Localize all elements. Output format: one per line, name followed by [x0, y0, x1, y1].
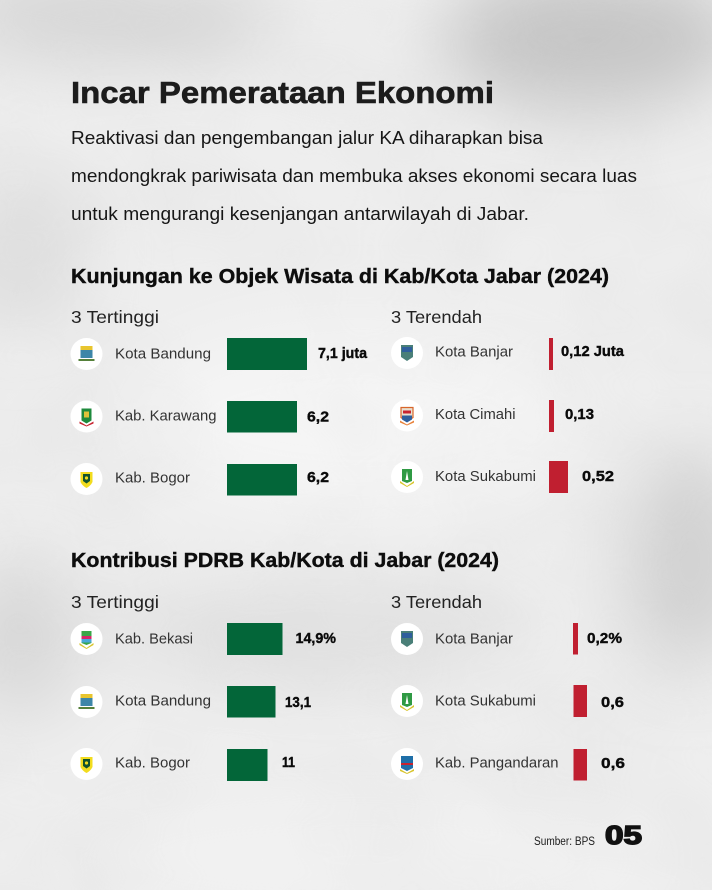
row: Kab. Bekasi PDRB: Kab. Bekasi — [115, 630, 193, 648]
row: Kab. Karawang wisata: Kab. Karawang — [115, 408, 216, 424]
icon: lambang Kab. Bogor — [70, 748, 102, 780]
subheading: 3 tertinggi PDRB: 3 Tertinggi — [71, 592, 159, 612]
icon: lambang Kota Banjar — [391, 623, 423, 655]
intro paragraph — [71, 127, 637, 224]
row: Kota Banjar wisata: Kota Banjar — [435, 344, 513, 360]
bar: 7,1 juta — [227, 338, 307, 370]
row: Kota Bandung wisata: 7,1 juta — [318, 345, 368, 362]
row: Kab. Pangandaran PDRB: Kab. Pangandaran — [435, 754, 558, 772]
row: Kab. Karawang wisata: 6,2 — [307, 408, 329, 426]
row: Kota Banjar PDRB: 0,2% — [587, 630, 622, 647]
row: Kota Cimahi wisata — [391, 400, 594, 432]
bar: 13,1 — [227, 686, 276, 718]
bar: 11 — [227, 749, 268, 781]
bar: 0,2% — [573, 623, 578, 654]
intro paragraph: untuk mengurangi kesenjangan antarwilayah di Jabar. — [71, 203, 529, 224]
icon: lambang Kab. Bogor — [70, 463, 102, 495]
bar: 0,52 — [549, 461, 568, 493]
row: Kota Sukabumi wisata — [391, 461, 614, 493]
row: Kab. Bogor PDRB: 11 — [282, 754, 295, 771]
bar: 0,6 — [574, 749, 587, 780]
row: Kota Cimahi wisata: Kota Cimahi — [435, 406, 516, 423]
bar: 6,2 — [227, 464, 297, 496]
row: Kab. Bekasi PDRB — [70, 623, 336, 655]
row: Kab. Bogor PDRB — [70, 748, 295, 781]
row: Kota Bandung PDRB — [70, 686, 311, 718]
row: Kota Banjar wisata — [391, 337, 625, 370]
row: Kab. Pangandaran PDRB: 0,6 — [601, 755, 625, 772]
icon: lambang Kab. Bekasi — [70, 623, 102, 655]
heading: kontribusi PDRB: Kontribusi PDRB Kab/Kota di Jabar (2024) — [71, 550, 499, 572]
bar: 0,12 juta — [549, 338, 553, 370]
bar: 14,9% — [227, 623, 282, 655]
row: Kota Banjar PDRB — [391, 623, 622, 655]
row: Kota Sukabumi wisata: 0,52 — [582, 468, 614, 485]
bar: 6,2 — [227, 401, 297, 432]
row: Kab. Bogor wisata — [70, 463, 329, 496]
row: Kota Banjar wisata: 0,12 Juta — [561, 343, 625, 360]
row: Kota Sukabumi PDRB: Kota Sukabumi — [435, 692, 536, 710]
subheading: 3 tertinggi wisata: 3 Tertinggi — [71, 307, 159, 327]
row: Kab. Bogor wisata: Kab. Bogor — [115, 470, 190, 486]
row: Kota Bandung PDRB: Kota Bandung — [115, 692, 211, 710]
bar: 0,13 — [549, 400, 554, 432]
icon: lambang Kota Bandung — [70, 686, 102, 718]
icon: lambang Kota Sukabumi — [391, 461, 423, 493]
icon: lambang Kota Banjar — [391, 337, 423, 369]
row: Kota Banjar PDRB: Kota Banjar — [435, 630, 513, 648]
row: Kota Bandung wisata: Kota Bandung — [115, 346, 211, 362]
title: Incar Pemerataan Ekonomi — [71, 75, 494, 110]
subheading: 3 terendah PDRB: 3 Terendah — [391, 592, 482, 612]
page number: 05 — [605, 822, 642, 850]
icon: lambang Kab. Karawang — [70, 400, 102, 432]
row: Kab. Bogor wisata: 6,2 — [307, 469, 329, 486]
row: Kota Bandung wisata — [70, 338, 368, 370]
row: Kota Sukabumi PDRB: 0,6 — [601, 694, 624, 711]
row: Kab. Pangandaran PDRB — [391, 748, 625, 780]
row: Kota Cimahi wisata: 0,13 — [565, 406, 594, 423]
intro paragraph: Reaktivasi dan pengembangan jalur KA diharapkan bisa — [71, 127, 544, 148]
row: Kota Bandung PDRB: 13,1 — [285, 694, 311, 711]
row: Kota Sukabumi PDRB — [391, 685, 624, 717]
intro paragraph: mendongkrak pariwisata dan membuka akses ekonomi secara luas — [71, 165, 637, 186]
bar: 0,6 — [574, 685, 587, 717]
heading: kunjungan wisata: Kunjungan ke Objek Wisata di Kab/Kota Jabar (2024) — [71, 266, 609, 288]
row: Kab. Bekasi PDRB: 14,9% — [296, 630, 336, 647]
row: Kab. Bogor PDRB: Kab. Bogor — [115, 754, 190, 772]
subheading: 3 terendah wisata: 3 Terendah — [391, 307, 482, 327]
icon: lambang Kota Bandung — [70, 338, 102, 370]
source note: Sumber: BPS — [534, 836, 595, 848]
row: Kota Sukabumi wisata: Kota Sukabumi — [435, 468, 536, 485]
icon: lambang Kota Cimahi — [391, 400, 423, 432]
row: Kab. Karawang wisata — [70, 400, 329, 432]
icon: lambang Kota Sukabumi — [391, 685, 423, 717]
icon: lambang Kab. Pangandaran — [391, 748, 423, 780]
